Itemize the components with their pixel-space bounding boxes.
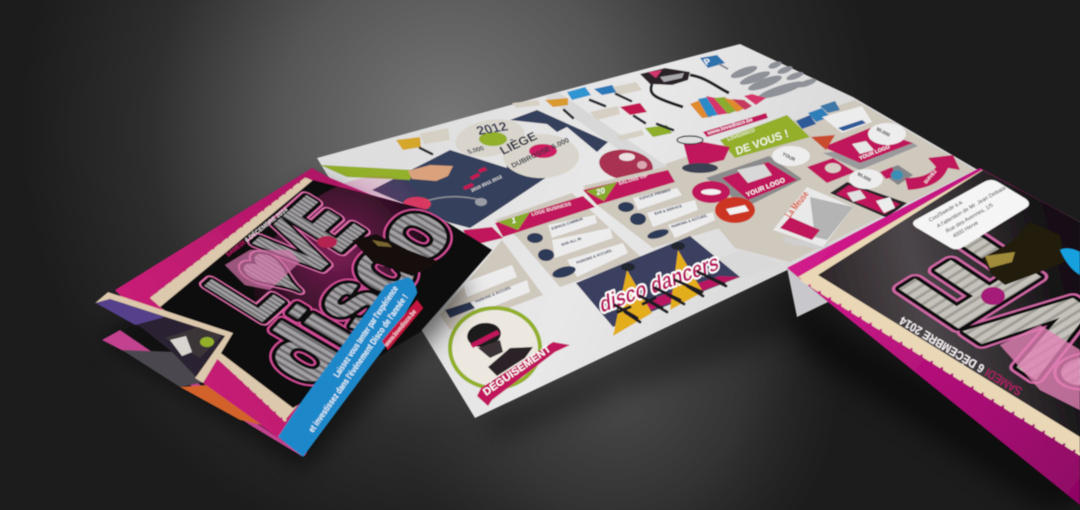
logo gray letters	[660, 73, 684, 82]
url bar	[703, 113, 768, 137]
mail patch	[876, 197, 895, 213]
row 2	[647, 200, 698, 227]
dancer 4	[675, 280, 703, 296]
beige caption 4	[590, 106, 620, 120]
address line 3: Rue des Avennes, 1/5	[945, 203, 995, 235]
torn edge: lower	[802, 280, 1080, 454]
cream badge face	[452, 310, 538, 386]
ticket left rows	[463, 265, 530, 313]
pale disc Liège	[503, 134, 579, 178]
icon house 2	[618, 202, 634, 212]
row icons	[445, 202, 670, 318]
tablet	[706, 156, 802, 207]
header ribbon	[583, 170, 675, 205]
row 2	[552, 228, 613, 258]
date text upside down: SAMEDI 6 DÉCEMBRE 2014	[896, 313, 1025, 399]
paper sheet back	[783, 237, 830, 250]
heart tint	[225, 250, 300, 290]
dancer	[317, 234, 440, 276]
camera pink top	[880, 167, 896, 179]
car row 4	[757, 78, 805, 102]
panel: left folded flyer	[95, 145, 492, 457]
ribbon text: DÉGUISEMENT	[480, 342, 554, 398]
figure 4	[616, 94, 631, 101]
green number triangle	[498, 212, 530, 230]
navy jacket	[372, 150, 553, 228]
blue sign 2	[594, 85, 618, 95]
title Liège: LIÈGE	[497, 129, 540, 157]
ribbon red tag	[382, 300, 423, 350]
circle badges	[692, 181, 755, 223]
stick figures	[420, 94, 673, 154]
camera lens	[891, 170, 903, 180]
blue ribbon	[278, 277, 423, 457]
blue sign 1	[567, 87, 591, 100]
logo patch	[737, 164, 772, 183]
green sign	[645, 125, 672, 137]
navy poster ground	[576, 236, 740, 327]
panel: right flyer	[787, 168, 1080, 505]
your logo text: YOUR LOGO	[745, 177, 786, 199]
pink sign	[620, 103, 647, 115]
purple haze	[96, 299, 165, 325]
afro hair	[465, 320, 503, 350]
bar 2	[470, 173, 480, 180]
pink floor	[618, 276, 740, 322]
disco fill: disco	[237, 187, 474, 399]
car column 2c	[786, 70, 804, 82]
phone bubble	[849, 169, 883, 189]
parking letter: P	[702, 57, 713, 67]
disco ball body	[597, 146, 655, 184]
torn edge: upper	[152, 178, 307, 298]
parking pole	[719, 64, 728, 69]
badge: deguisement	[448, 306, 570, 406]
vinyl discs	[452, 114, 579, 178]
microphone	[420, 197, 480, 203]
yellow sign	[396, 137, 421, 150]
your brand bubble	[772, 146, 810, 166]
dancer 5	[698, 272, 726, 286]
laptop bubble figure: 90.000	[875, 126, 891, 139]
title 2012: 2012	[474, 119, 510, 138]
megaphone horn	[682, 138, 730, 168]
label espace commun: ESPACE COMMUN	[551, 217, 584, 231]
label espace premier: ESPACE PREMIER	[639, 188, 672, 201]
megaphone rim	[677, 136, 703, 144]
address line 2: A l'attention de Mr. Jean Delsaia	[936, 185, 1008, 230]
disco ball highlights	[619, 153, 635, 161]
beige panel: ticket 1	[495, 193, 642, 287]
label parking left: PARKING & ACCUEIL	[475, 285, 513, 304]
laptop label: YOUR LOGO	[859, 144, 891, 162]
love outer outline: L♥VE	[186, 183, 383, 334]
beige caption 1	[420, 128, 450, 144]
navy top band	[510, 110, 608, 152]
car row 2	[739, 69, 771, 87]
jacket shoulder	[488, 347, 533, 376]
row 1	[548, 215, 597, 238]
bar 1	[463, 183, 474, 190]
lower photo	[122, 350, 205, 387]
beige caption 5	[617, 130, 644, 141]
white folded edge	[787, 268, 828, 317]
car column 2b	[776, 64, 794, 76]
disco dark outline: disco	[237, 187, 474, 399]
row 1	[463, 265, 517, 297]
row labels	[475, 188, 709, 304]
logo: love upside down	[871, 220, 1080, 478]
columns	[810, 197, 853, 240]
green call-out	[720, 115, 810, 158]
stat visitors left: 5.000	[466, 145, 486, 156]
parked cars	[729, 60, 817, 102]
icon car 2	[646, 227, 670, 241]
ribbon	[477, 342, 570, 406]
car column 2a	[767, 60, 783, 70]
dancer pink skirt	[981, 287, 1005, 305]
header label: LOGE BUSINESS	[531, 201, 573, 218]
green arm	[320, 165, 413, 180]
green scalloped badge	[448, 306, 542, 390]
love dark outline: L♥VE	[186, 183, 383, 334]
dancer right	[981, 222, 1065, 305]
beige torn border	[150, 178, 440, 420]
tablet frame	[706, 156, 802, 207]
ribbon line two: et investissez dans l'événement Disco de l'année !	[306, 292, 410, 434]
icon van	[445, 302, 475, 318]
row 3	[668, 212, 715, 238]
chart labels on jacket: 2010 2011 2012	[470, 174, 503, 193]
pink circle	[692, 181, 730, 203]
pink vinyl	[529, 144, 557, 158]
phone QR	[847, 190, 866, 202]
heart tint right	[1000, 325, 1080, 410]
torn edge: lower	[205, 345, 285, 420]
card body	[822, 106, 872, 133]
card	[913, 180, 1029, 249]
label bar all in: BAR ALL IN	[561, 237, 582, 247]
icon glass 2	[630, 213, 646, 225]
figure 5	[634, 116, 645, 123]
pale disc 2012	[452, 114, 528, 162]
figure 6	[657, 124, 673, 130]
bubble	[772, 146, 810, 166]
dancers silhouettes	[615, 272, 726, 322]
address card	[913, 180, 1029, 249]
arrow	[905, 155, 960, 190]
spotlight 1	[621, 263, 635, 271]
red pill	[726, 205, 749, 215]
face and moustache	[478, 340, 503, 358]
figure 1	[420, 148, 432, 154]
tablet screen	[722, 162, 797, 200]
address line 4: 4000 Herve	[952, 220, 980, 240]
folded beige frame	[95, 292, 233, 383]
icon car	[551, 264, 577, 280]
twitter icon	[808, 108, 830, 122]
dancer gold highlight	[985, 252, 1015, 268]
url text: www.lovedisco.be	[383, 308, 418, 349]
row 1	[633, 188, 682, 210]
newspaper	[773, 187, 853, 250]
ticket header left	[463, 227, 503, 246]
ribbon body	[278, 277, 417, 457]
megaphone base	[682, 163, 718, 173]
facebook card	[822, 106, 872, 133]
phone bubble text: 90.000	[856, 171, 872, 184]
disco dancers title outline: disco dancers	[599, 248, 720, 318]
figure 2	[564, 110, 573, 118]
beige advertising panel	[665, 100, 975, 262]
headband	[470, 330, 500, 348]
ticket 20 header	[583, 170, 675, 205]
shadow: left flyer	[100, 180, 470, 470]
facebook icon	[796, 115, 816, 129]
bar 3	[478, 167, 487, 173]
dancer body	[982, 222, 1065, 285]
disco outer outline: disco	[237, 187, 474, 399]
icon house	[527, 233, 543, 243]
signs row	[396, 82, 672, 150]
icon glass	[538, 249, 554, 261]
spotlight 2	[671, 242, 685, 250]
beige caption 2	[512, 100, 540, 108]
laptop shell	[823, 128, 913, 163]
dancer head	[317, 236, 337, 248]
pink outer cover	[115, 168, 420, 456]
ribbon line one: Laissez vous tenter par l'expérience	[331, 284, 400, 379]
microphone head	[475, 198, 487, 206]
pennant	[811, 135, 835, 150]
retro phone	[807, 158, 855, 183]
light beam 1	[613, 270, 652, 336]
crowd	[690, 94, 766, 118]
fold shading	[545, 92, 690, 190]
car column 2d	[797, 77, 817, 89]
label parking vip: PARKING & ACCUEIL	[671, 213, 709, 229]
car row 1	[729, 63, 759, 81]
header label: SALONS VIP	[618, 173, 649, 187]
pink cover	[787, 168, 1080, 505]
laptop base	[823, 143, 918, 170]
disco logo badge	[640, 68, 690, 85]
black photo area	[160, 180, 492, 408]
smartphone	[830, 169, 907, 218]
disco ball	[597, 146, 655, 184]
small photo inset	[165, 327, 222, 358]
beige panel: ticket 20	[583, 166, 727, 248]
folded photo page	[95, 292, 233, 383]
bubble text: YOUR	[781, 151, 796, 164]
phone body	[830, 182, 907, 218]
linkedin icon	[820, 101, 840, 113]
shadow: right flyer	[790, 300, 1080, 510]
beige caption 3	[613, 82, 642, 95]
car row 3	[747, 73, 783, 93]
paper sheet	[773, 187, 853, 247]
ticket 1 header	[495, 196, 595, 237]
beige border	[798, 170, 1080, 453]
dancer body	[352, 234, 440, 276]
lower page	[102, 330, 303, 457]
green number triangle	[586, 182, 617, 201]
poster: disco dancers	[576, 236, 740, 336]
phone body	[807, 158, 855, 183]
blue ribbon corner	[1060, 248, 1080, 275]
dancer 1	[615, 305, 640, 322]
dancer 3	[655, 288, 684, 304]
beige panel: ticket left	[440, 240, 543, 330]
pink ad	[780, 217, 820, 240]
social icons	[796, 101, 840, 129]
dancer 2	[640, 296, 667, 312]
shadow: central sheet	[480, 268, 830, 440]
stat visitors right: DUBROSSE 6.000	[509, 136, 571, 170]
white pill	[701, 189, 721, 195]
brochure paper sheet	[317, 44, 978, 418]
arrow label: SUIVEZ	[923, 169, 938, 185]
camera body	[880, 165, 913, 185]
panel: central open brochure	[317, 44, 978, 418]
laptop bubble	[868, 123, 906, 145]
jacket bars	[463, 167, 487, 190]
orange sign	[545, 98, 568, 107]
megaphone	[677, 136, 730, 173]
jacket logo	[403, 197, 431, 211]
figure 3	[590, 100, 605, 106]
number 1: 1	[511, 215, 517, 226]
light beam 2	[670, 250, 703, 310]
hand	[408, 165, 453, 181]
label parking: PARKING & ACCUEIL	[576, 248, 614, 265]
newspaper name: La Meuse	[783, 190, 812, 220]
logo heart	[648, 70, 662, 78]
lime vinyl	[479, 132, 507, 146]
header ribbon	[495, 196, 595, 237]
laptop	[823, 123, 918, 170]
disco ball highlights lower	[637, 161, 647, 169]
row 3	[567, 243, 628, 277]
label bar service: BAR & SERVICE	[654, 204, 683, 216]
logo plate	[640, 68, 690, 85]
call-out text: DE VOUS !	[734, 128, 790, 158]
phone dial	[825, 163, 841, 173]
dancer highlight	[372, 240, 392, 247]
facebook button	[838, 120, 866, 131]
ticket 1 rows	[548, 215, 628, 277]
number 20: 20	[596, 186, 606, 197]
logo: disco	[237, 187, 474, 399]
date text: SAMEDI 6 DÉCEMBRE 2014	[224, 205, 290, 259]
camera	[880, 165, 913, 185]
call-out small text: LOVEDISCO	[727, 127, 756, 143]
laptop screen text patch	[852, 141, 874, 154]
green character	[200, 337, 214, 347]
inset white figure	[170, 336, 192, 356]
row 2	[470, 280, 530, 313]
orange strip	[180, 385, 262, 425]
love fill: L♥VE	[186, 183, 383, 334]
photo area	[818, 170, 1080, 437]
white pale band	[665, 250, 782, 280]
parking sign	[700, 55, 728, 69]
ticket 20 rows	[633, 188, 715, 238]
parking plate	[700, 55, 725, 68]
disco dancers title: disco dancers	[599, 248, 720, 318]
phone screen	[836, 185, 900, 214]
url label: www.lovedisco.be	[706, 117, 754, 137]
stage arch	[651, 75, 729, 107]
address line 1: Coo/Swede s.a.	[928, 199, 965, 224]
logo: love	[186, 183, 383, 334]
red circle	[715, 197, 755, 223]
pink glow	[225, 145, 455, 365]
folded photo	[95, 299, 225, 377]
